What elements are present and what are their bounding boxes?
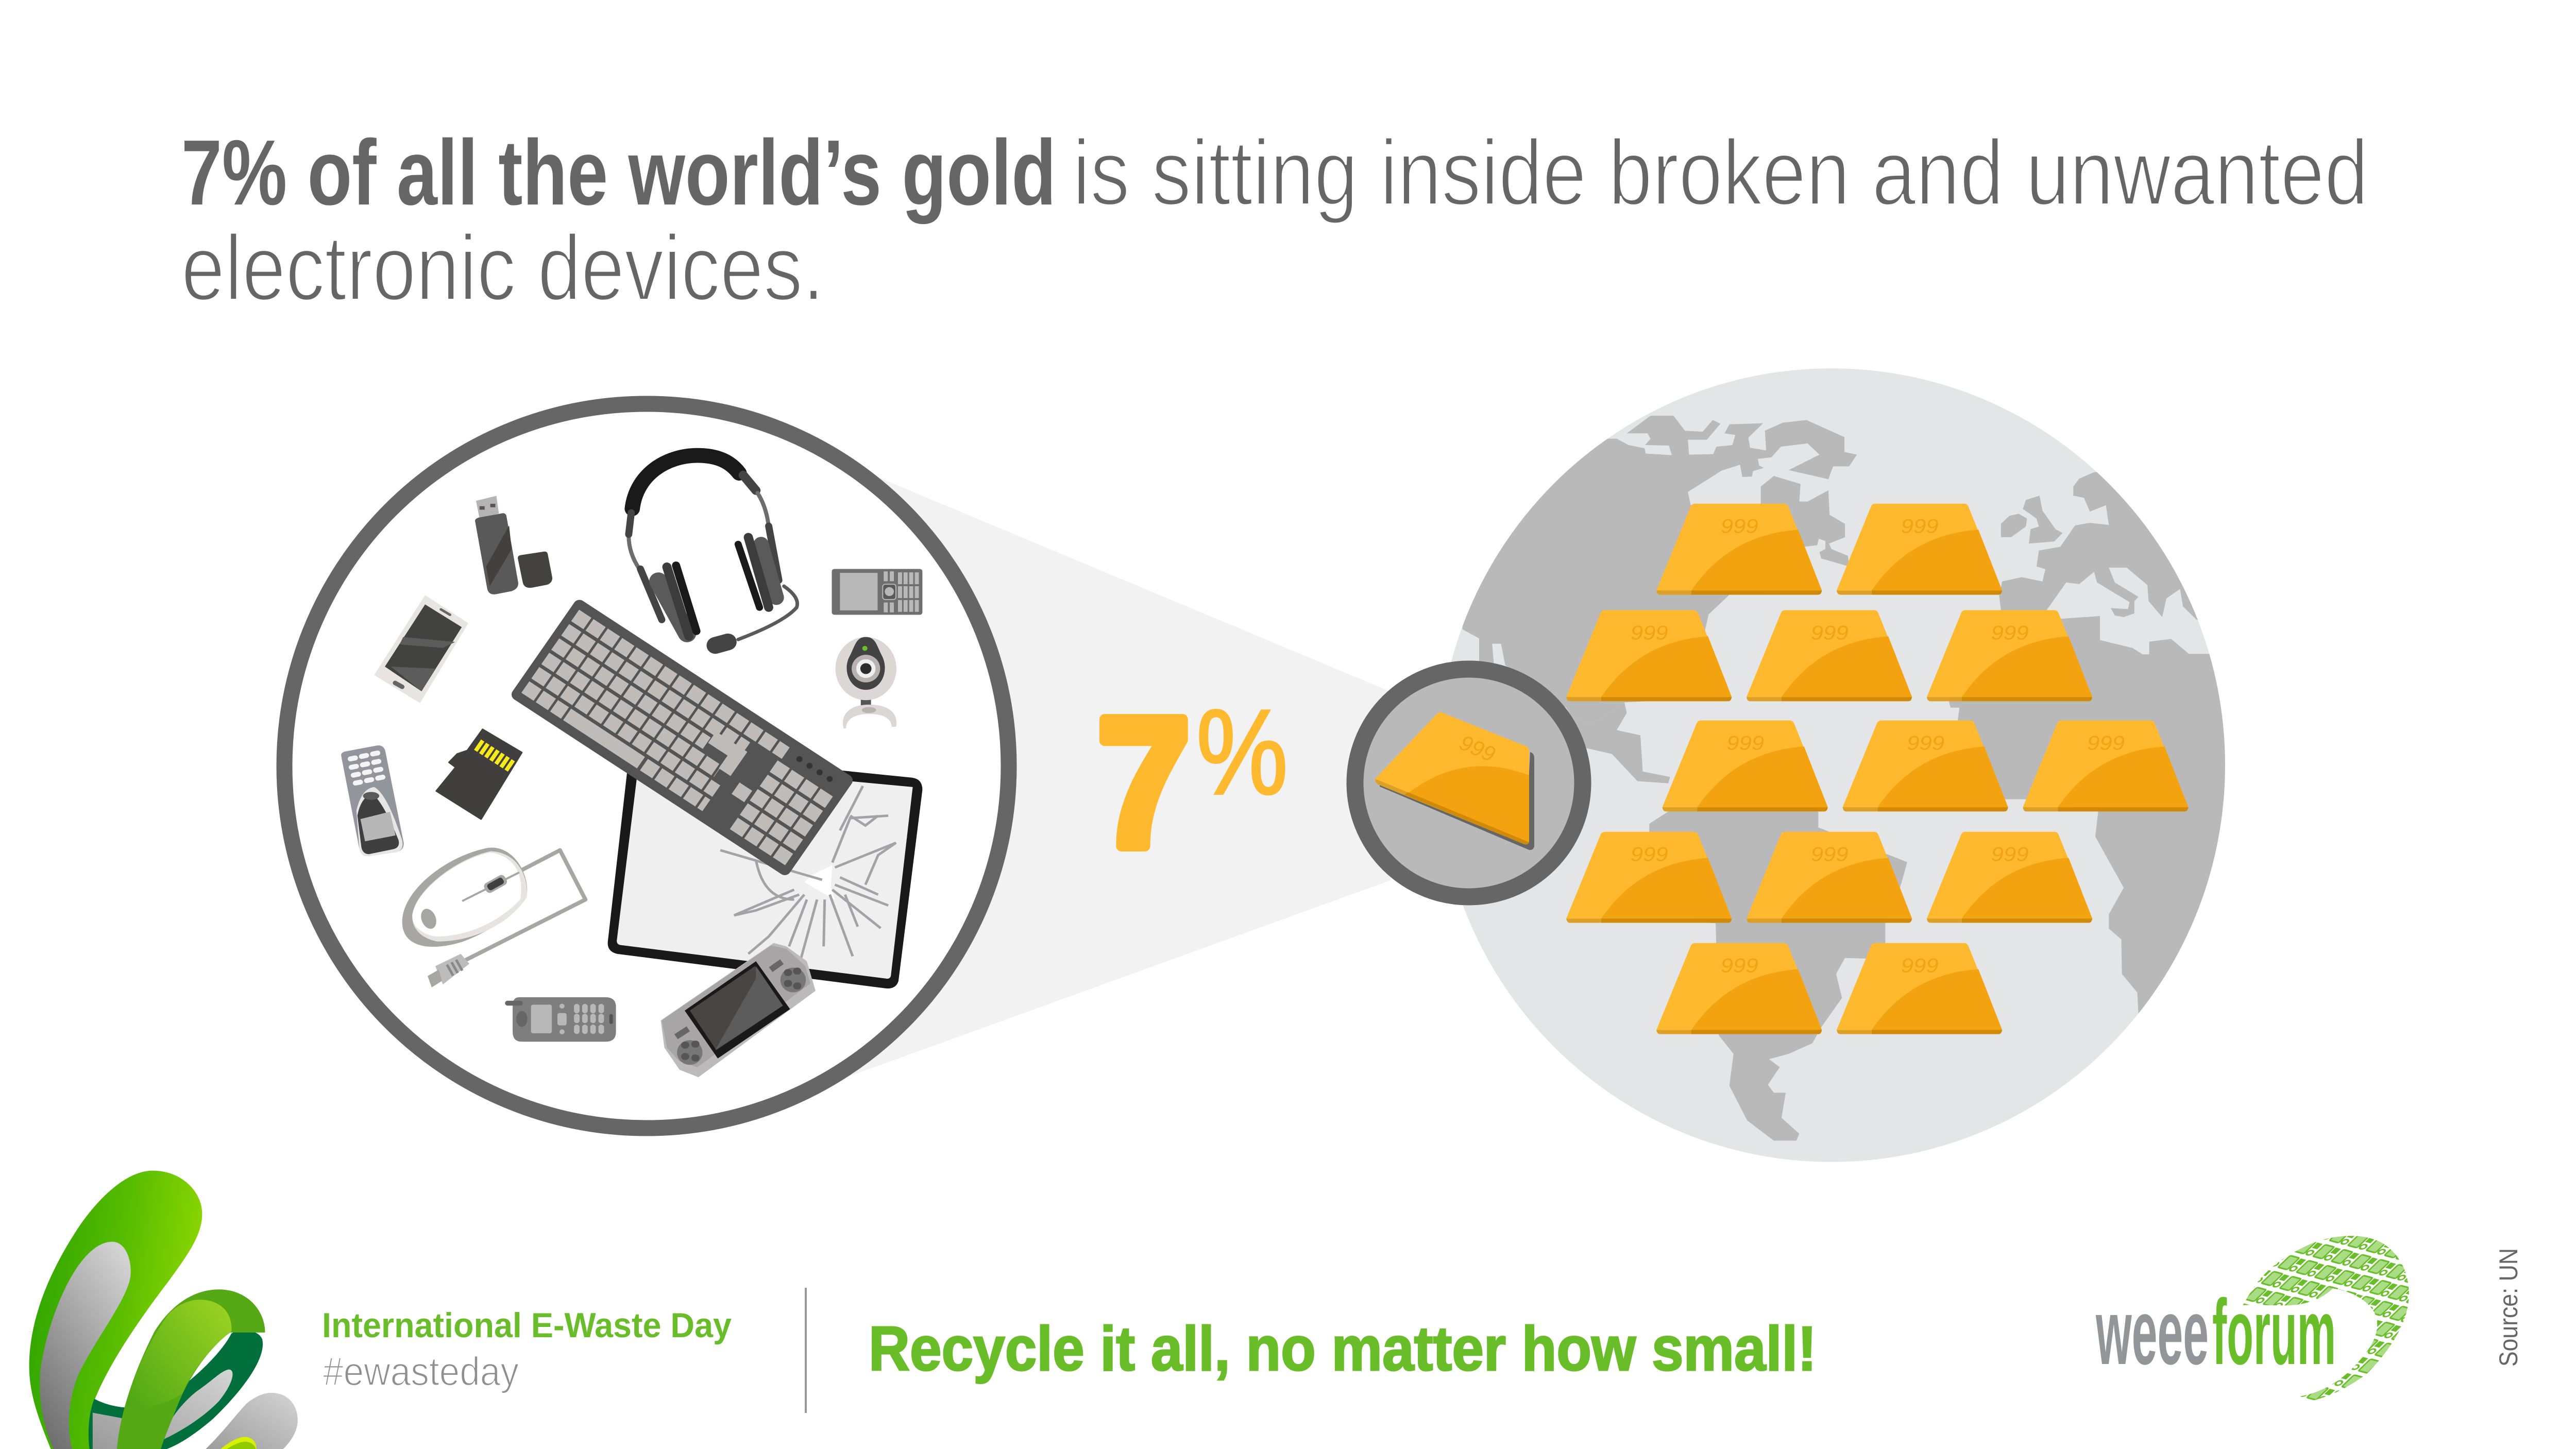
- gold bar 12: 999: [1721, 954, 1758, 977]
- small magnifier circle with gold bar: [1355, 669, 1583, 897]
- gold bar 10: 999: [1811, 843, 1849, 865]
- rotated gold bar: [1375, 712, 1534, 850]
- gold bar 7: [1843, 721, 2008, 811]
- micro sd card: [436, 729, 522, 819]
- slogan: Recycle it all, no matter how small!: [869, 1314, 1817, 1384]
- figure 7: 7: [1097, 680, 1190, 885]
- panel: devices circle: [284, 404, 1009, 1128]
- weee forum logo: [2096, 1236, 2409, 1402]
- gold bar 1: [1656, 504, 1822, 595]
- gold bar 4: [1747, 610, 1912, 701]
- gold bar 9: 999: [1631, 843, 1668, 865]
- screen cracks: [720, 786, 896, 961]
- gold bar 13: 999: [1901, 954, 1939, 977]
- gold bar 8: [2023, 721, 2189, 811]
- gold bar 9: [1566, 832, 1732, 923]
- gold bar 10: [1747, 832, 1912, 923]
- headset: [629, 455, 798, 645]
- divider: [805, 1288, 807, 1413]
- heading second line: electronic devices.: [181, 216, 824, 320]
- logo swirl of devices: [2243, 1236, 2409, 1402]
- gold bar 7: 999: [1907, 731, 1944, 754]
- panel: globe with gold bars: [1397, 368, 2287, 1162]
- event logo: [29, 1171, 298, 1449]
- gold bar 4: 999: [1811, 621, 1849, 644]
- gold bar 12: [1656, 943, 1822, 1034]
- south america: [1649, 811, 1907, 1140]
- gold bar 8: 999: [2087, 731, 2125, 754]
- logo yellow tip: [218, 1437, 257, 1449]
- gold bar 5: [1927, 610, 2092, 701]
- globe disc: [1437, 368, 2225, 1162]
- gold bar 11: [1927, 832, 2092, 923]
- logo leaf middle highlight: [126, 1300, 231, 1407]
- north america: [1397, 416, 1857, 724]
- usb stick: [475, 496, 552, 594]
- europe: [1999, 457, 2287, 620]
- cable and mouse: [402, 847, 585, 987]
- weee forum logo: forum: [2212, 1281, 2336, 1384]
- hashtag: #ewasteday: [323, 1349, 519, 1394]
- gold bar 2: 999: [1901, 515, 1939, 537]
- devices illustration: [341, 455, 922, 1077]
- bar stamp: 999: [1456, 730, 1499, 766]
- logo grey leaf right: [204, 1393, 298, 1449]
- broken tablet: [608, 749, 922, 988]
- webcam: [835, 637, 896, 728]
- keyboard: [509, 598, 855, 877]
- handheld console: [661, 943, 816, 1077]
- event name: International E-Waste Day: [322, 1306, 732, 1345]
- magnifier beam: [840, 473, 1391, 1080]
- footer: [29, 1171, 2523, 1449]
- logo grey centre: [93, 1369, 233, 1449]
- logo leaf middle: [117, 1289, 265, 1449]
- weee forum logo: weee: [2096, 1281, 2209, 1384]
- mobile organiser: [832, 569, 922, 615]
- percent sign: %: [1196, 684, 1288, 820]
- central america: [1566, 702, 1670, 783]
- gold bar 2: [1837, 504, 2002, 595]
- lens disc: [1355, 669, 1583, 897]
- gold bar 13: [1837, 943, 2002, 1034]
- gold bar 3: 999: [1631, 621, 1668, 644]
- world map continents: [1397, 416, 2287, 1140]
- remote control: [341, 745, 404, 856]
- africa: [1949, 610, 2287, 1017]
- heading: [181, 121, 2368, 320]
- logo leaf left: [29, 1171, 202, 1449]
- feature phone: [505, 997, 616, 1042]
- heading regular part: is sitting inside broken and unwanted: [1073, 121, 2368, 225]
- iceland and british isles: [2001, 496, 2063, 543]
- gold bar 6: [1663, 721, 1828, 811]
- gold bar 1: 999: [1721, 515, 1758, 537]
- heading bold part: 7% of all the world’s gold: [181, 121, 1056, 225]
- gold bar 11: 999: [1991, 843, 2029, 865]
- big 7 percent figure: [1097, 680, 1288, 885]
- gold bar 6: 999: [1726, 731, 1764, 754]
- gold bar 5: 999: [1991, 621, 2029, 644]
- logo dark green band: [89, 1331, 263, 1449]
- smartphone: [374, 595, 468, 703]
- gold bars: [1566, 504, 2189, 1034]
- gold bar 3: [1566, 610, 1732, 701]
- logo grey inner left: [40, 1242, 131, 1449]
- source note: Source: UN: [2494, 1248, 2523, 1367]
